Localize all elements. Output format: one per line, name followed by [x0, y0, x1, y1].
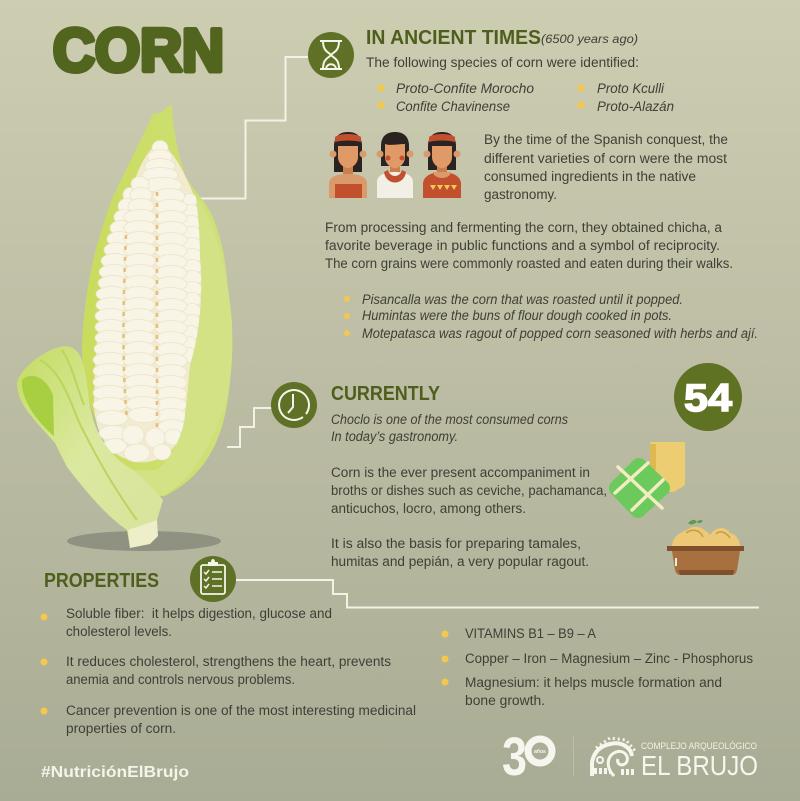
heading: (6500 years ago)	[541, 32, 638, 46]
icon: clipboard	[190, 556, 236, 602]
choclo text: Choclo is one of the most consumed corns	[331, 412, 568, 427]
logo: el brujo: COMPLEJO ARQUEOLÓGICO	[641, 741, 757, 751]
accompaniment text: Corn is the ever present accompaniment in	[331, 465, 590, 480]
kernels column 2	[123, 176, 160, 422]
species list: Confite Chavinense	[396, 99, 510, 114]
paragraph: spanish conquest	[484, 132, 728, 202]
intro: The following species of corn were identified:	[366, 55, 639, 70]
badge: 54	[674, 363, 742, 431]
logo: 30 años	[502, 727, 552, 787]
person 1	[329, 132, 367, 198]
icon: three native people	[329, 132, 461, 198]
logo: 30 años: 3	[502, 727, 527, 787]
health benefits list: cholesterol levels.	[66, 624, 172, 639]
accompaniment text	[331, 465, 607, 516]
back husk	[82, 104, 231, 496]
paragraph: chicha: The corn grains were commonly roasted and eaten during their walks.	[325, 256, 733, 271]
connector: corn to ancient times	[200, 57, 310, 198]
preparations list: Pisancalla was the corn that was roasted until it popped.	[362, 292, 683, 307]
paragraph: spanish conquest: consumed ingredients in the native	[484, 169, 696, 184]
tamales text: humitas and pepián, a very popular ragout.	[331, 554, 589, 569]
species list	[378, 81, 674, 114]
paragraph: chicha: From processing and fermenting the corn, they obtained chicha, a	[325, 220, 722, 235]
health benefits list: It reduces cholesterol, strengthens the heart, prevents	[66, 654, 391, 669]
logo: 30 años: años	[534, 749, 546, 755]
nutrients list: Copper – Iron – Magnesium – Zinc - Phosphorus	[465, 651, 753, 666]
logo mark	[592, 738, 636, 776]
preparations list: Motepatasca was ragout of popped corn seasoned with herbs and ají.	[362, 326, 758, 341]
heading: IN ANCIENT TIMES	[366, 27, 541, 49]
preparations list	[344, 292, 758, 341]
accompaniment text: broths or dishes such as ceviche, pachamanca,	[331, 483, 607, 498]
title: CORN	[53, 17, 224, 84]
fold inner	[22, 376, 54, 436]
paragraph: spanish conquest: gastronomy.	[484, 187, 557, 202]
hashtag: #NutriciónElBrujo	[41, 764, 189, 781]
nutrients list: bone growth.	[465, 693, 545, 708]
ear base	[94, 142, 201, 462]
health benefits list: properties of corn.	[66, 721, 176, 736]
kernels column 3	[142, 140, 187, 434]
icon: hourglass	[308, 32, 354, 78]
section: in ancient times	[308, 27, 758, 341]
species list: Proto-Confite Morocho	[396, 81, 534, 96]
icon: clock	[271, 382, 317, 428]
species list: Proto Kculli	[597, 81, 665, 96]
choclo text	[331, 412, 568, 444]
connector: properties rule	[236, 580, 759, 608]
heading: PROPERTIES	[44, 570, 159, 592]
connector: corn to currently	[227, 408, 272, 447]
health benefits list: anemia and controls nervous problems.	[66, 672, 295, 687]
nutrients list: VITAMINS B1 – B9 – A	[465, 626, 596, 641]
heading: CURRENTLY	[331, 383, 441, 405]
nutrients list	[442, 626, 753, 708]
front fold husk	[17, 346, 163, 548]
fold crease	[40, 350, 137, 520]
choclo text: In today’s gastronomy.	[331, 429, 458, 444]
person 2	[376, 132, 414, 198]
badge: 54: 54	[684, 377, 732, 420]
heading	[366, 27, 638, 49]
tamales text: It is also the basis for preparing tamales,	[331, 536, 581, 551]
logo: el brujo	[592, 738, 758, 781]
section: currently	[271, 363, 744, 575]
kernels column 4	[181, 194, 202, 362]
kernel gaps	[124, 192, 157, 440]
corn shadow	[67, 531, 221, 551]
species list: Proto-Alazán	[597, 99, 674, 114]
corn illustration	[17, 104, 232, 548]
paragraph: chicha	[325, 220, 733, 271]
person 3	[423, 132, 461, 198]
paragraph: chicha: favorite beverage in public functions and a symbol of reciprocity.	[325, 238, 720, 253]
section: properties	[40, 556, 753, 736]
icon: tamal	[615, 442, 685, 510]
logo: el brujo: EL BRUJO	[641, 750, 758, 781]
health benefits list: Cancer prevention is one of the most interesting medicinal	[66, 703, 416, 718]
stem	[128, 520, 158, 548]
bottom kernels	[122, 425, 182, 462]
accompaniment text: anticuchos, locro, among others.	[331, 501, 526, 516]
paragraph: spanish conquest: By the time of the Spanish conquest, the	[484, 132, 728, 147]
paragraph: spanish conquest: different varieties of corn were the most	[484, 151, 727, 166]
right front husk	[133, 197, 232, 495]
kernels column 1	[93, 188, 137, 454]
preparations list: Humintas were the buns of flour dough cooked in pots.	[362, 308, 672, 323]
tamales text	[331, 536, 589, 569]
divider	[573, 736, 574, 776]
icon: bowl of ragout	[667, 520, 744, 575]
nutrients list: Magnesium: it helps muscle formation and	[465, 675, 722, 690]
health benefits list: Soluble fiber: it helps digestion, glucose and	[66, 606, 332, 621]
health benefits list	[40, 606, 416, 736]
